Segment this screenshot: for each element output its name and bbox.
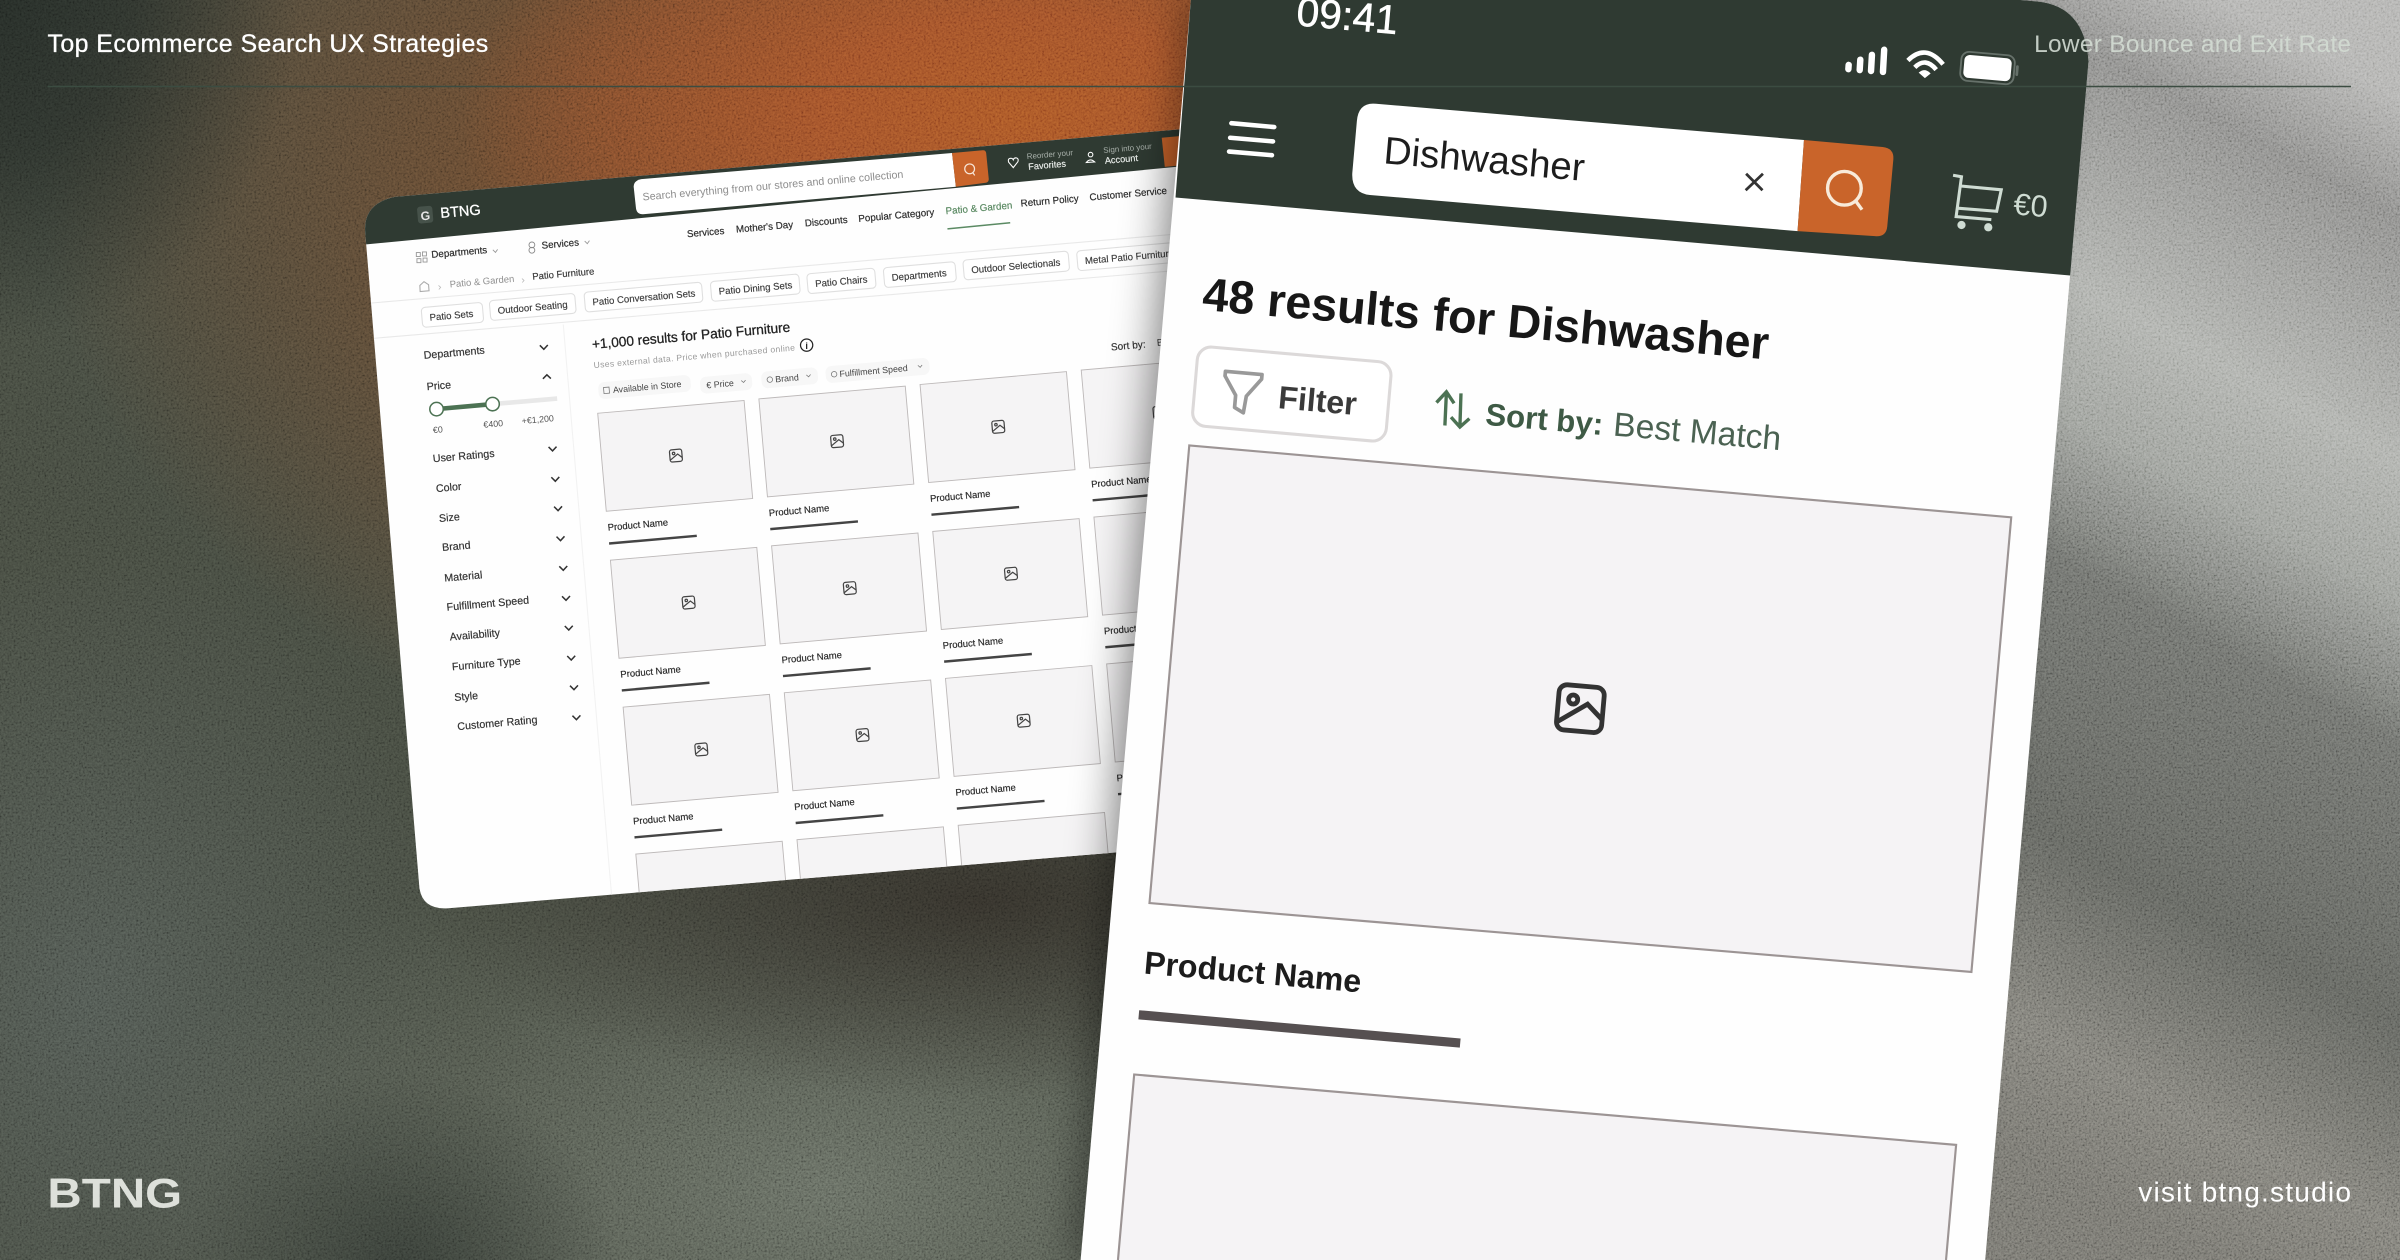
shadow under screens <box>1068 0 2066 1260</box>
desktop product grid: Product Name <box>942 636 1004 652</box>
desktop results heading: i <box>805 341 808 351</box>
desktop breadcrumb: Patio Furniture <box>532 266 595 283</box>
desktop results heading <box>592 324 1162 368</box>
price slider: €400 <box>483 418 504 430</box>
desktop navigation: Mother's Day <box>736 220 794 236</box>
desktop account links: Favorites <box>1028 159 1067 172</box>
panel: mobile search results screen <box>1081 0 2089 1260</box>
desktop product grid: Product Name <box>768 503 830 519</box>
sort control: Best Match <box>1612 407 1783 458</box>
desktop filter sidebar: Price <box>426 379 452 393</box>
desktop navigation: Popular Category <box>858 207 935 225</box>
desktop filter sidebar: Customer Rating <box>457 714 538 733</box>
desktop filter sidebar: Availability <box>449 627 501 644</box>
price slider <box>430 397 557 435</box>
icon: clear <box>1746 174 1763 190</box>
desktop product grid: Product Name <box>794 797 855 813</box>
desktop filter sidebar: Size <box>439 511 460 525</box>
desktop filter pills: Brand <box>775 372 799 384</box>
price slider: €0 <box>432 424 443 435</box>
desktop account links: Reorder your <box>1026 148 1074 161</box>
desktop logo: BTNG <box>440 202 481 222</box>
desktop account links: Account <box>1104 153 1139 166</box>
desktop category chips: Patio Chairs <box>815 274 868 290</box>
desktop category chips <box>421 240 1200 327</box>
mobile search box <box>1352 104 1893 236</box>
desktop product grid: Product Name <box>1116 768 1177 784</box>
second product image placeholder <box>1118 1074 1956 1260</box>
header rule <box>47 85 2351 87</box>
logo: BTNG: BTNG <box>47 1170 182 1217</box>
product name: Product Name <box>1143 945 1363 999</box>
desktop navigation: Discounts <box>804 215 848 230</box>
desktop results heading: +1,000 results for Patio Furniture <box>591 320 791 352</box>
sort control: Sort by: <box>1484 397 1605 442</box>
icon: image <box>1556 684 1605 733</box>
desktop category chips: Metal Patio Furniture <box>1085 248 1175 267</box>
desktop breadcrumb: Patio & Garden <box>449 274 515 290</box>
desktop product grid: Product Name <box>620 664 681 681</box>
desktop filter pills: Available in Store <box>613 379 682 395</box>
desktop filter sidebar: Departments <box>423 345 485 362</box>
desktop dividers <box>367 234 1179 903</box>
desktop filter sidebar: Color <box>435 481 462 495</box>
desktop filter sidebar: Style <box>454 690 479 704</box>
desktop product grid: Product Name <box>955 783 1016 799</box>
icon: magnifier <box>1828 171 1862 210</box>
desktop product grid: Product Name <box>930 489 991 505</box>
desktop product grid: Product Name <box>781 650 842 666</box>
desktop header bar <box>361 126 1224 245</box>
sort control <box>1436 392 1783 458</box>
desktop filter sidebar: Material <box>444 569 483 585</box>
desktop product grid <box>597 362 1159 892</box>
icon: wifi <box>1908 53 1943 77</box>
desktop product grid: Product Name <box>633 811 694 828</box>
desktop navigation <box>416 186 1167 263</box>
desktop navigation: Departments <box>431 245 488 261</box>
icon: battery <box>1960 51 2020 85</box>
desktop breadcrumb <box>420 266 595 292</box>
desktop filter sidebar <box>423 345 580 733</box>
desktop navigation: Patio & Garden <box>945 200 1013 217</box>
desktop results heading: Best Match <box>1156 334 1205 349</box>
desktop filter sidebar: User Ratings <box>432 448 495 465</box>
shadow cast by phone on desktop <box>1080 129 1180 855</box>
desktop results heading: Uses external data. Price when purchased online <box>593 343 796 370</box>
desktop filter sidebar: Furniture Type <box>452 655 521 673</box>
desktop navigation: Services <box>687 226 725 240</box>
desktop filter pills: € Price <box>706 378 734 390</box>
desktop filter sidebar: Fulfillment Speed <box>446 595 530 614</box>
footer link: visit btng.studio <box>2138 1177 2351 1208</box>
desktop product grid: Product Name <box>607 517 669 534</box>
mobile header bar <box>1176 0 2089 276</box>
filter button <box>1192 346 1392 442</box>
icon: hamburger menu <box>1229 123 1274 155</box>
desktop category chips: Departments <box>891 268 947 284</box>
desktop account links <box>1008 136 1179 170</box>
desktop results heading: Sort by: <box>1111 340 1146 353</box>
mobile search box: Dishwasher <box>1382 129 1587 190</box>
desktop product grid: Product Name <box>1091 474 1152 490</box>
desktop search box <box>634 150 989 214</box>
desktop category chips: Patio Dining Sets <box>718 280 793 298</box>
desktop logo <box>417 204 480 224</box>
desktop filter pills <box>603 364 922 394</box>
icon: signal bars <box>1848 50 1884 72</box>
desktop logo: G <box>420 209 431 223</box>
desktop search box: Search everything from our stores and online collection <box>642 169 904 203</box>
desktop category chips: Outdoor Seating <box>497 300 568 317</box>
search button <box>1798 140 1893 236</box>
price slider: +€1,200 <box>521 413 554 426</box>
filter button: Filter <box>1277 379 1359 422</box>
desktop navigation: Customer Service <box>1089 186 1167 203</box>
desktop navigation: Services <box>541 237 580 252</box>
desktop account links: Sign into your <box>1103 142 1152 155</box>
desktop category chips: Outdoor Selectionals <box>971 257 1061 276</box>
price placeholder bar <box>1139 1015 1460 1043</box>
desktop product grid: Product Name <box>1104 621 1165 637</box>
desktop filter sidebar: Brand <box>442 540 471 554</box>
desktop filter pills: Fulfillment Speed <box>839 363 908 379</box>
product image placeholder <box>1149 445 2011 972</box>
panel: desktop search results screen <box>365 129 1180 908</box>
mobile results heading: 48 results for Dishwasher <box>1201 268 1771 369</box>
desktop category chips: Patio Sets <box>429 309 474 324</box>
title: Top Ecommerce Search UX Strategies <box>47 30 488 58</box>
icon: cart <box>1953 175 2001 230</box>
desktop category chips: Patio Conversation Sets <box>592 288 696 308</box>
cart total: €0 <box>2012 187 2049 224</box>
subtitle right: Lower Bounce and Exit Rate <box>2034 31 2351 58</box>
desktop navigation: Return Policy <box>1020 194 1079 210</box>
